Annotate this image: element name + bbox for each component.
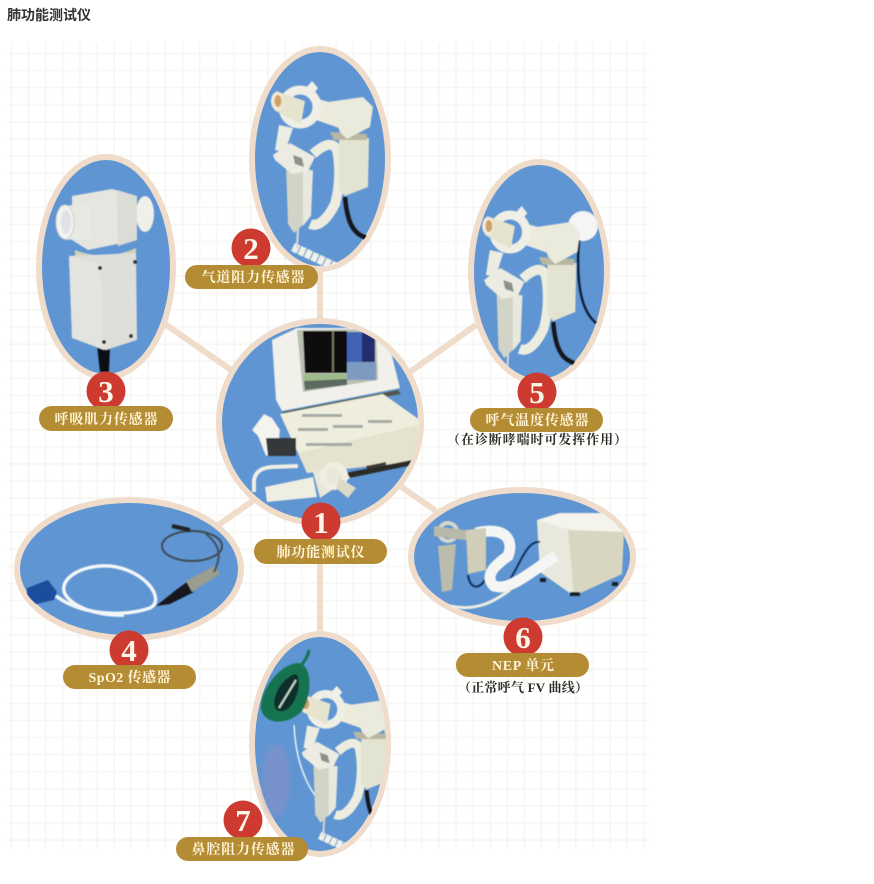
badge 3 [86,372,126,410]
badge 2: 2 [243,231,259,266]
panel: 5 exhaled temperature sensor [447,162,627,447]
oval 7 [252,634,388,854]
panel: 4 SpO2 sensor [17,500,241,689]
label 2 [185,265,318,289]
label 3: 呼吸肌力传感器 [54,411,158,428]
label 1 [254,539,387,564]
badge 6 [504,618,542,656]
label 2: 气道阻力传感器 [202,269,304,286]
panel: 2 airway resistance sensor [185,49,388,289]
oval 5 [471,162,607,382]
badge 5: 5 [529,375,545,410]
grid paper background [8,42,650,850]
label 1: 肺功能测试仪 [276,544,364,561]
oval 2 [252,49,388,269]
badge 7 [224,800,262,840]
badge 5 [518,372,556,412]
label 5: 呼气温度传感器 [486,412,588,429]
badge 6: 6 [515,620,531,655]
badge 1: 1 [313,505,329,540]
label 6: NEP 单元 [492,657,554,674]
label 6 [456,653,589,677]
panel: 1 main spirometer [219,321,421,564]
oval 3 [39,157,173,377]
connector lines [165,265,476,636]
badge 2 [232,228,270,268]
oval 4 [17,500,241,638]
photo: main unit [252,328,420,502]
panel: 7 nasal resistance sensor [176,634,392,861]
badge 3: 3 [98,374,114,409]
panel: 3 respiratory muscle sensor [39,157,173,431]
photo: handheld sensor with mask [261,650,392,855]
note 5: （在诊断哮喘时可发挥作用） [447,432,627,447]
panel: 6 NEP unit [411,490,633,695]
label 3 [39,406,173,431]
note 6: （正常呼气 FV 曲线） [458,680,588,695]
label 7 [176,837,308,861]
photo: handheld sensor 2 [271,81,373,269]
title: 肺功能测试仪 [7,7,91,23]
badge 1 [302,502,340,542]
photo: handheld sensor 5 [482,206,598,394]
label 7: 鼻腔阻力传感器 [192,841,294,858]
photo: muscle force sensor [56,189,154,372]
label 5 [470,408,603,432]
badge 4 [110,630,148,670]
badge 7: 7 [235,803,251,838]
label 4 [63,665,196,689]
photo: NEP box and hose [434,513,624,608]
badge 4: 4 [121,633,137,668]
oval 6 [411,490,633,624]
label 4: SpO2 传感器 [88,669,170,686]
texture: pink mottling [262,744,290,816]
circle 1 [219,321,421,523]
photo: SpO2 cable [27,526,222,615]
